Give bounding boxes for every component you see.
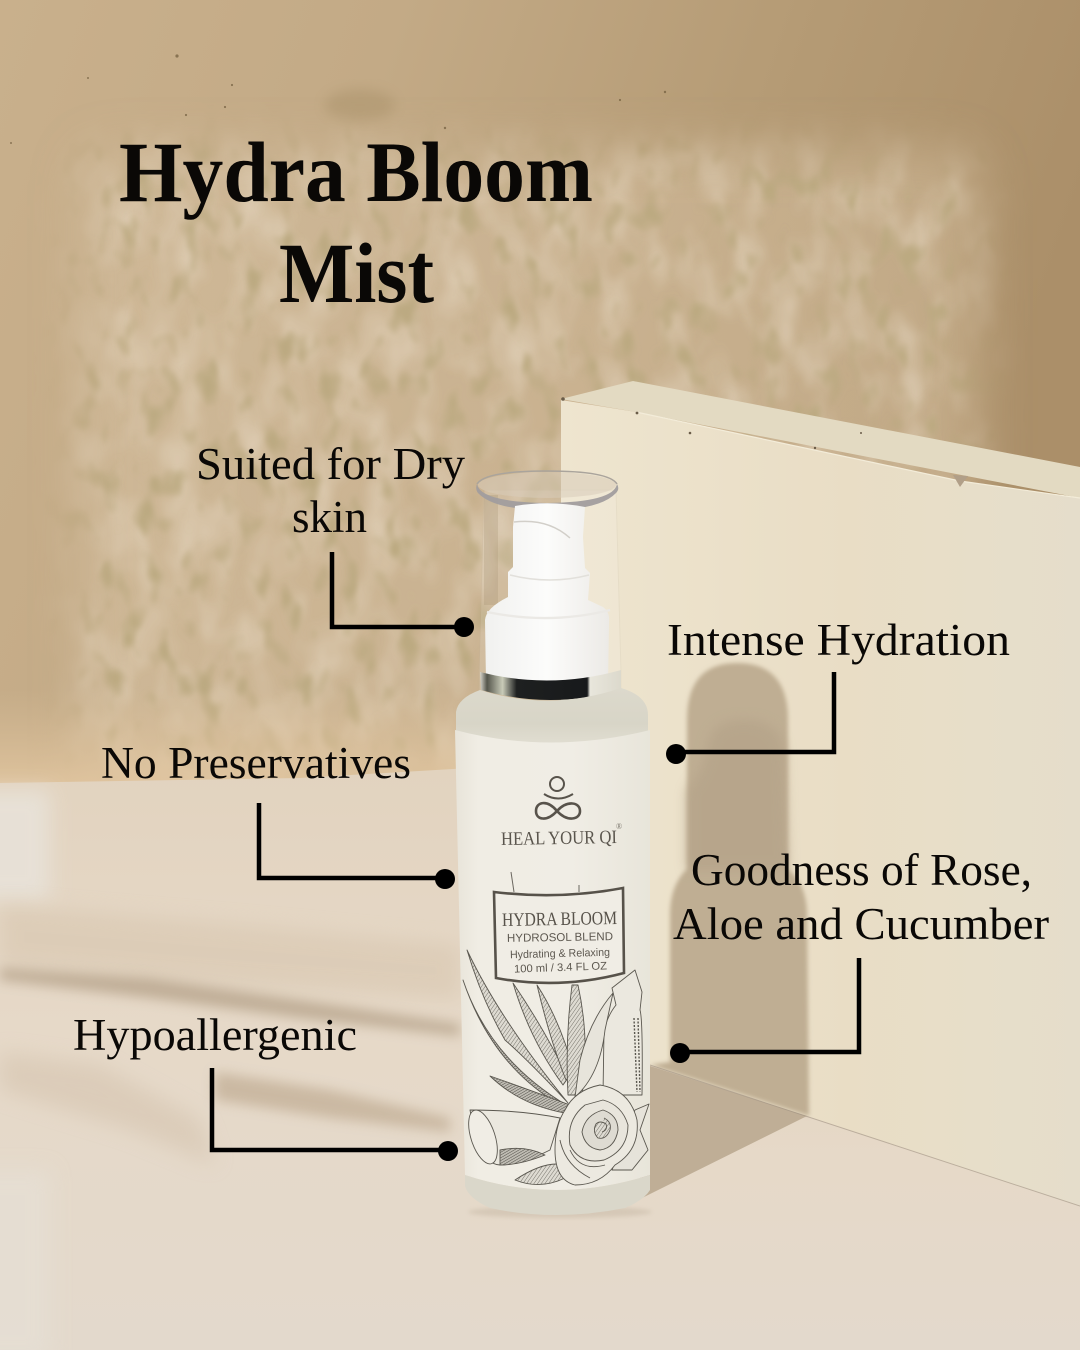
callout: intense hydration — [666, 615, 1010, 764]
label box: HYDROSOL BLEND — [507, 931, 613, 945]
clear cap — [476, 471, 621, 692]
callout: hypoallergenic — [73, 1010, 458, 1161]
brand name: HEAL YOUR QI — [501, 827, 617, 850]
callout: intense hydration: Intense Hydration — [667, 615, 1010, 665]
title: Hydra Bloom — [119, 124, 593, 220]
bottle shadow on floor — [640, 1052, 807, 1199]
cut aloe leaf — [470, 1110, 560, 1165]
background: textured wall — [0, 0, 1080, 800]
rose — [515, 1085, 649, 1185]
frosted base — [465, 1175, 650, 1215]
bottle shadow on block — [650, 663, 809, 1116]
glass bottle drawing — [603, 970, 642, 1095]
bottle — [455, 471, 652, 1218]
contact shadow — [468, 1206, 652, 1218]
background: cream block — [561, 381, 1080, 1206]
label box: 100 ml / 3.4 FL OZ — [514, 960, 607, 976]
label body — [455, 730, 650, 1190]
title: Mist — [279, 225, 434, 321]
background: tabletop with palm shadows — [0, 768, 1080, 1350]
botanical illustration — [463, 950, 649, 1185]
logo — [536, 777, 580, 819]
label box: HYDRA BLOOM — [502, 908, 617, 931]
label box — [494, 872, 624, 983]
callout: goodness of rose, aloe and cucumber: Goodness of Rose, — [691, 845, 1032, 895]
frosted shoulder — [456, 688, 648, 748]
callout: suited for dry skin: Suited for Dry — [196, 439, 466, 489]
registered mark: ® — [616, 822, 622, 831]
callout: no preservatives — [101, 738, 455, 889]
callout: suited for dry skin: skin — [292, 492, 367, 542]
label box: Hydrating & Relaxing — [510, 947, 610, 961]
silver collar — [480, 670, 621, 700]
callout: no preservatives: No Preservatives — [101, 738, 411, 788]
callout: suited for dry skin — [196, 439, 474, 637]
callout: goodness of rose, aloe and cucumber: Aloe and Cucumber — [673, 899, 1049, 949]
bottle shadow inner core — [687, 720, 788, 870]
callout: goodness of rose, aloe and cucumber — [670, 845, 1049, 1063]
title — [119, 124, 593, 321]
pump — [485, 503, 610, 688]
callout: hypoallergenic: Hypoallergenic — [73, 1010, 357, 1060]
